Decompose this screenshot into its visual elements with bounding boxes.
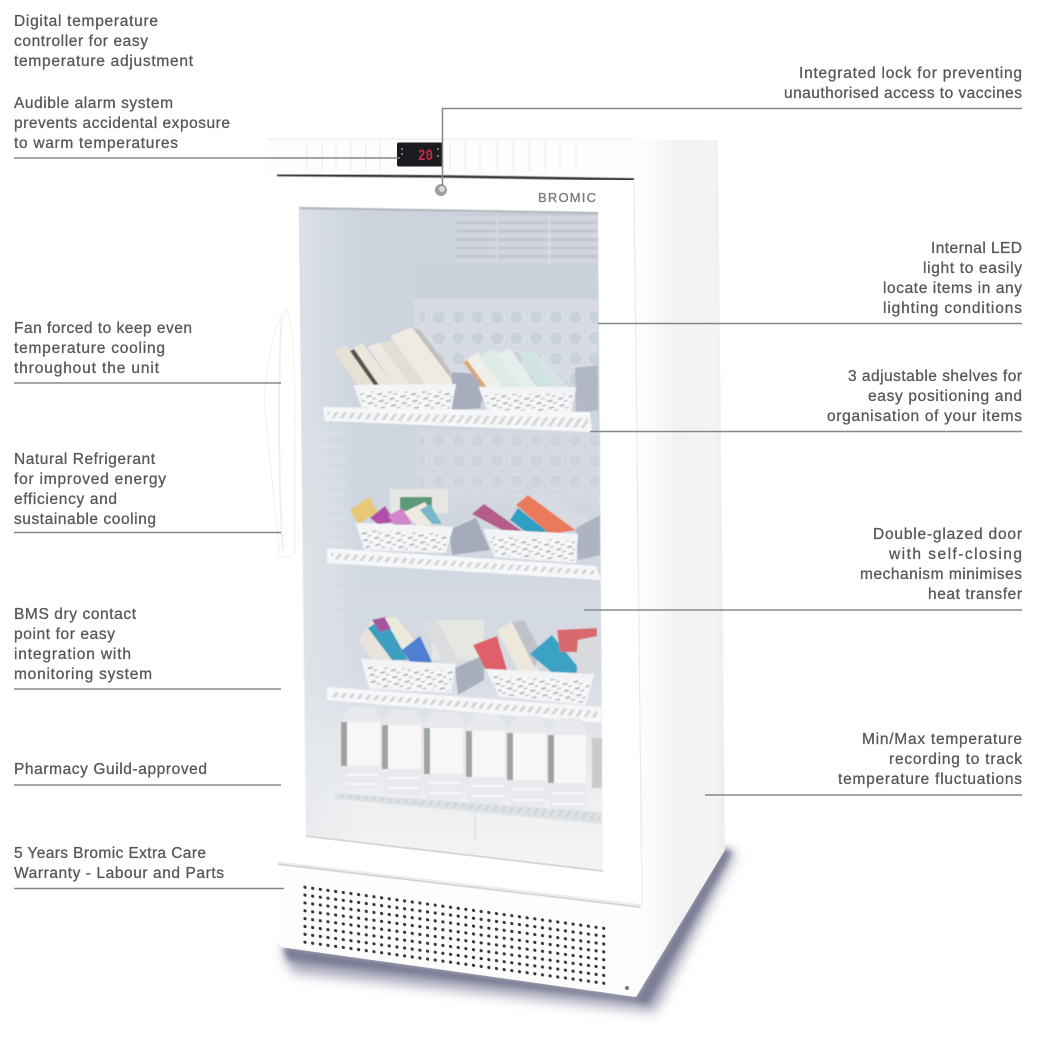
floor shadow	[282, 848, 736, 1012]
callout: warranty	[14, 845, 284, 888]
callout: internal LED: Internal LED	[931, 240, 1022, 257]
callout: fan forced: throughout the unit	[14, 360, 160, 377]
door lock	[435, 184, 447, 196]
left basket	[355, 384, 455, 411]
callout: natural refrigerant: for improved energy	[14, 471, 166, 488]
callout: fan forced	[14, 320, 281, 383]
door frame	[272, 177, 642, 904]
callout: adjustable shelves: easy positioning and	[868, 388, 1022, 405]
side wall ribs	[304, 430, 344, 680]
callout: digital temperature controller: Digital temperature	[14, 13, 158, 30]
callout: adjustable shelves: organisation of your items	[827, 408, 1022, 425]
side wall shading	[300, 210, 362, 842]
callout: warranty: Warranty - Labour and Parts	[14, 865, 224, 882]
callout: BMS dry contact: BMS dry contact	[14, 606, 137, 623]
callout: min/max temperature	[705, 731, 1022, 795]
bottom shelf	[335, 793, 602, 841]
callout: integrated lock: unauthorised access to vaccines	[784, 85, 1022, 102]
shelf 3	[327, 687, 601, 723]
base screw	[625, 986, 629, 990]
shelf 2	[327, 548, 601, 580]
callout: pharmacy guild: Pharmacy Guild-approved	[14, 761, 207, 778]
ventilation holes	[303, 885, 609, 990]
callout: integrated lock: Integrated lock for preventing	[799, 65, 1022, 82]
callout: integrated lock	[442, 65, 1022, 186]
callout: digital temperature controller: controller for easy	[14, 33, 148, 50]
basket side shadow	[452, 372, 484, 411]
callout: min/max temperature: temperature fluctuations	[838, 771, 1022, 788]
door handle	[264, 309, 295, 557]
right basket	[487, 669, 593, 704]
callout: BMS dry contact: monitoring system	[14, 666, 152, 683]
callout: double-glazed door: heat transfer	[928, 586, 1022, 603]
callout: adjustable shelves	[590, 368, 1022, 432]
callout: internal LED	[598, 240, 1022, 324]
callout: double-glazed door: with self-closing	[888, 546, 1022, 563]
right basket	[480, 387, 575, 415]
callout: natural refrigerant: sustainable cooling	[14, 511, 156, 528]
callout: min/max temperature: Min/Max temperature	[862, 731, 1022, 748]
callout: natural refrigerant	[14, 451, 281, 532]
callout: warranty: 5 Years Bromic Extra Care	[14, 845, 206, 862]
callout: internal LED: lighting conditions	[883, 300, 1022, 317]
callout: internal LED: light to easily	[923, 260, 1022, 277]
left basket	[357, 523, 452, 552]
fridge side panel	[630, 140, 725, 997]
callout: BMS dry contact: integration with	[14, 646, 131, 663]
shelf 1 contents	[334, 327, 598, 415]
left basket	[362, 659, 455, 692]
callout: natural refrigerant: Natural Refrigerant	[14, 451, 156, 468]
callout: fan forced: temperature cooling	[14, 340, 165, 357]
shelf 3 contents	[358, 617, 597, 704]
callout: min/max temperature: recording to track	[889, 751, 1022, 768]
callout: audible alarm system	[14, 95, 400, 158]
callout: adjustable shelves: 3 adjustable shelves for	[848, 368, 1022, 385]
callout: BMS dry contact: point for easy	[14, 626, 115, 643]
door gasket line	[277, 175, 634, 180]
fridge top control panel	[268, 138, 636, 178]
callout: double-glazed door: Double-glazed door	[873, 526, 1022, 543]
callout: audible alarm system: Audible alarm system	[14, 95, 173, 112]
water bottles	[341, 707, 602, 812]
fridge illustration	[264, 138, 736, 1012]
callout: digital temperature controller: temperature adjustment	[14, 53, 194, 70]
callout: internal LED: locate items in any	[883, 280, 1022, 297]
digital temperature controller: 20	[418, 147, 433, 165]
callout: digital temperature controller	[14, 13, 194, 70]
shelf 1	[323, 407, 592, 432]
brand logo: BROMIC	[538, 190, 596, 205]
callout: double-glazed door	[584, 526, 1022, 610]
callout: double-glazed door: mechanism minimises	[860, 566, 1022, 583]
lower rear panel	[416, 430, 600, 505]
glass interior	[299, 207, 603, 870]
callout: BMS dry contact	[14, 606, 281, 689]
upper rear panel	[414, 264, 598, 300]
door glass edge	[306, 835, 603, 872]
base plinth	[278, 865, 640, 997]
callout: fan forced: Fan forced to keep even	[14, 320, 192, 337]
callout: natural refrigerant: efficiency and	[14, 491, 117, 508]
digital temperature controller	[397, 142, 443, 166]
callout: audible alarm system: to warm temperatures	[14, 135, 178, 152]
right basket	[485, 529, 577, 562]
callout: audible alarm system: prevents accidental exposure	[14, 115, 230, 132]
shelf 2 contents	[350, 489, 600, 562]
rear vent	[457, 214, 598, 264]
